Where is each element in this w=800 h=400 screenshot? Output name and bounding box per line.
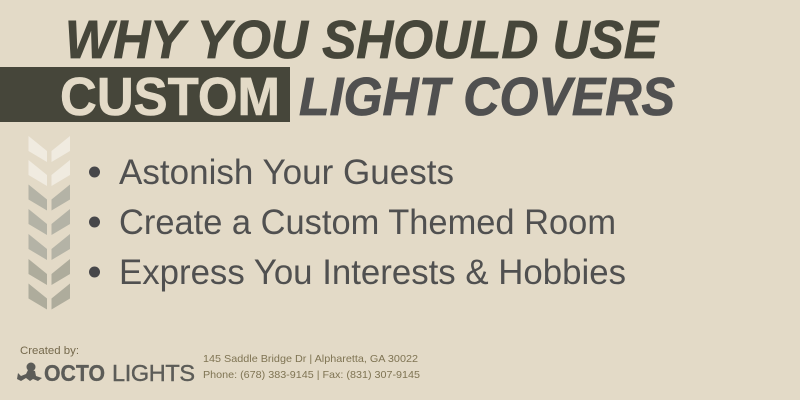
bullet list <box>89 153 626 292</box>
created by label: Created by: <box>20 345 79 357</box>
bullet 1: Astonish Your Guests <box>119 153 454 192</box>
title highlight bar <box>0 67 290 122</box>
address: 145 Saddle Bridge Dr | Alpharetta, GA 30022 <box>203 353 418 365</box>
title line 1: WHY YOU SHOULD USE <box>65 10 660 70</box>
chevron column icon <box>28 136 70 310</box>
contact details <box>203 353 420 381</box>
title line 2: LIGHT COVERS <box>299 67 675 127</box>
icon: octopus logo <box>17 362 42 381</box>
logo wordmark <box>44 360 195 386</box>
phone and fax: Phone: (678) 383-9145 | Fax: (831) 307-9145 <box>203 369 420 381</box>
bullet 2: Create a Custom Themed Room <box>119 203 616 242</box>
logo wordmark: LIGHTS <box>112 360 195 386</box>
title word: custom: CUSTOM <box>60 67 280 127</box>
bullet 3: Express You Interests & Hobbies <box>119 253 626 292</box>
logo wordmark: OCTO <box>44 360 105 386</box>
